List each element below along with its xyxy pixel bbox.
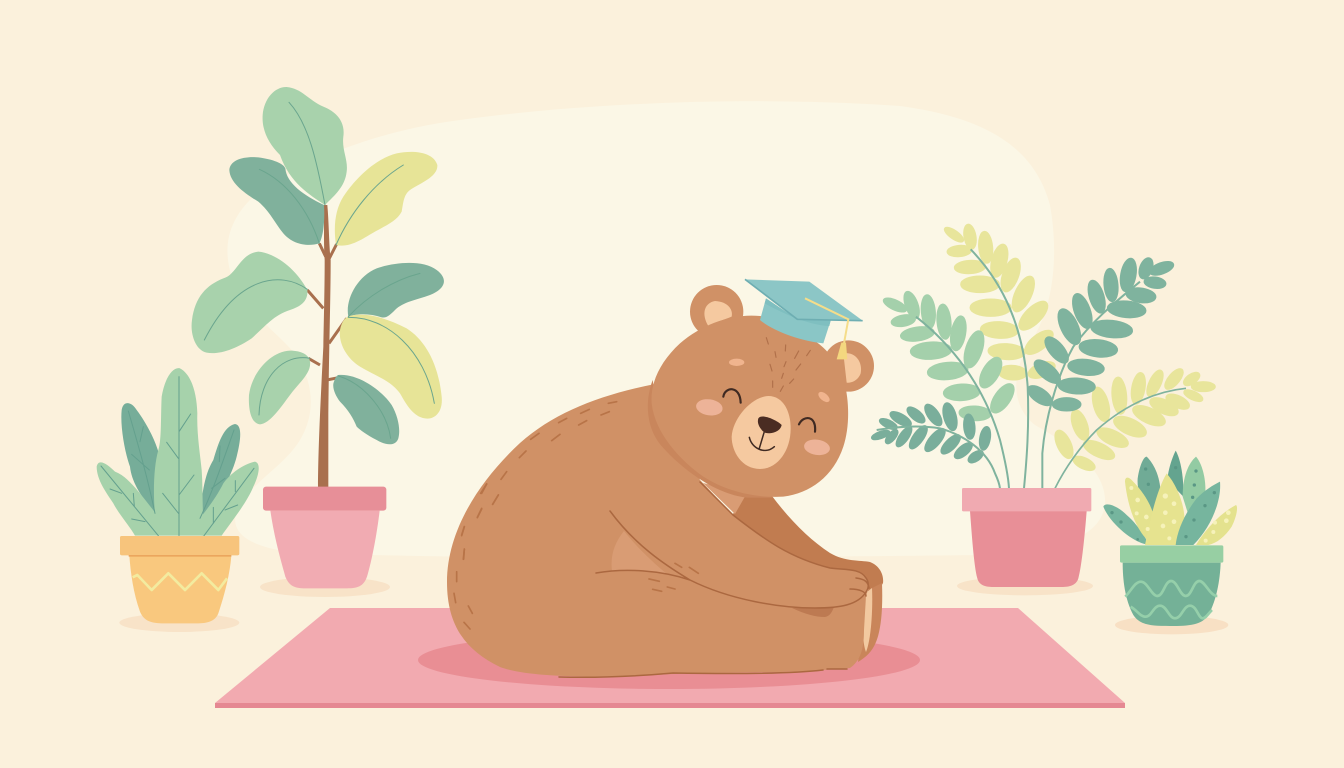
- cheeks: [695, 398, 831, 457]
- trunk: [307, 205, 347, 488]
- fur dashes on hip and arm: [454, 484, 698, 629]
- pink pot: [263, 487, 386, 588]
- leaves: [97, 368, 259, 536]
- collar shadow: [648, 380, 773, 498]
- graduation cap: [745, 279, 863, 359]
- tall plant in pink pot: [192, 87, 444, 597]
- succulent in green pot: [1103, 451, 1237, 634]
- pot shadow: [1115, 616, 1228, 634]
- right fern plant in pink pot: [871, 224, 1215, 595]
- low dark frond: [871, 402, 1000, 488]
- hand underside: [792, 607, 834, 617]
- pot shadow: [119, 613, 239, 632]
- closed eyes: [723, 389, 815, 432]
- left ear: [690, 285, 743, 338]
- brow highlights: [729, 359, 831, 404]
- mouth: [749, 433, 774, 450]
- tassel: [805, 298, 848, 359]
- light green frond: [882, 290, 1018, 488]
- dark teal frond: [1025, 256, 1175, 488]
- green pot: [1120, 545, 1223, 626]
- bear head: [648, 279, 874, 498]
- yellow right frond: [1052, 366, 1215, 488]
- background blob: [227, 101, 1105, 557]
- forehead fur marks: [766, 338, 810, 391]
- bear belly highlights: [612, 483, 747, 575]
- pink pot: [962, 488, 1091, 587]
- yellow pot: [120, 536, 239, 623]
- left plant in yellow pot: [97, 368, 259, 632]
- leaves: [192, 87, 444, 444]
- succulent leaves: [1103, 451, 1237, 545]
- nose: [758, 417, 782, 433]
- pot shadow: [260, 577, 390, 597]
- yoga mat: [215, 608, 1125, 708]
- right ear: [823, 340, 874, 392]
- muzzle: [732, 396, 791, 469]
- pot shadow: [957, 577, 1093, 595]
- bear: [447, 279, 883, 677]
- bear far foot: [858, 583, 882, 662]
- bear body: [447, 384, 868, 676]
- bear far arm: [733, 490, 883, 590]
- yellow upright frond: [943, 224, 1057, 488]
- bear limb lines: [559, 482, 869, 677]
- fur dashes on back: [462, 402, 617, 559]
- head shape: [651, 316, 848, 497]
